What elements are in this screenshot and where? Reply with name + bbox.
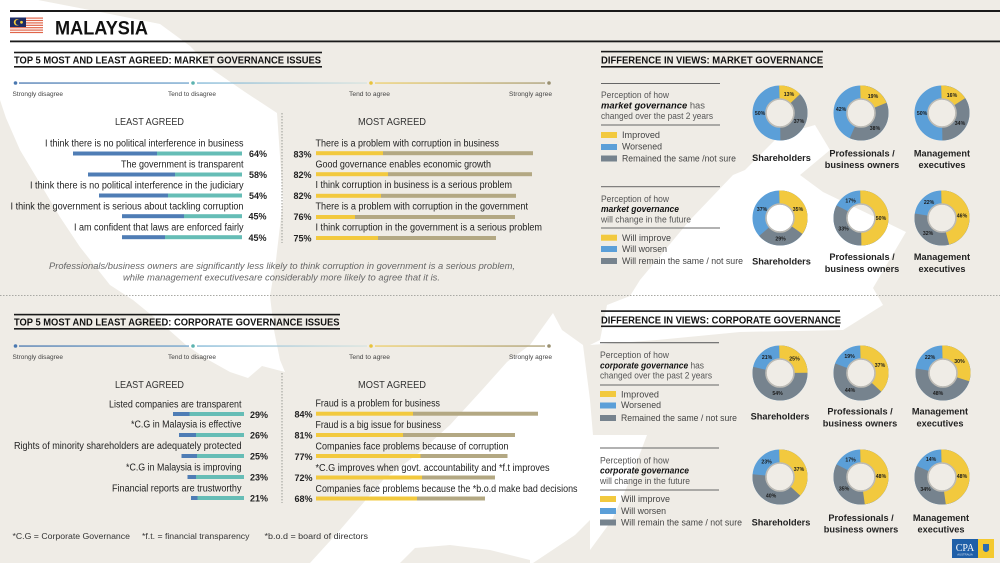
donut: management future: 14%	[926, 457, 937, 463]
donut: shareholders future: 29%	[775, 236, 786, 242]
legend: past 2 years: Perception of how	[600, 350, 670, 360]
donut: professionals future: 48%	[876, 474, 887, 480]
most agreed list: 84%	[294, 410, 313, 420]
least agreed list: Listed companies are transparent	[109, 399, 242, 410]
donut: professionals future: 17%	[845, 198, 856, 204]
legend: future: Will worsen	[622, 244, 667, 254]
group labels: business owners	[825, 264, 899, 274]
least agreed list: I think the government is serious about tackling corruption	[10, 201, 244, 212]
donut: professionals past: 19%	[844, 354, 855, 360]
italic note	[49, 261, 515, 282]
group labels: Professionals /	[828, 513, 894, 523]
CPA logo: CPA	[956, 543, 975, 554]
legend: past 2 years: corporate governance has	[600, 360, 705, 370]
most agreed list: There is a problem with corruption in business	[316, 138, 499, 149]
most agreed list: 76%	[294, 212, 312, 223]
least agreed list: 21%	[250, 494, 268, 504]
group labels: executives	[918, 264, 966, 274]
italic note: Professionals/business owners are significantly less likely to think corruption in government is a serious problem,	[49, 261, 515, 271]
donut: professionals past: 19%	[868, 94, 879, 100]
most agreed list: 81%	[294, 430, 313, 442]
donut: professionals future: 33%	[838, 226, 849, 232]
legend: past 2 years: changed over the past 2 years	[601, 111, 714, 121]
group labels	[752, 252, 970, 274]
donut: management past: 30%	[954, 359, 965, 365]
agreement scale: Strongly disagree	[12, 91, 63, 98]
donut: management future	[920, 456, 968, 498]
footnotes	[12, 531, 368, 541]
legend: past 2 years: Worsened	[621, 400, 661, 410]
donut: shareholders future	[760, 456, 805, 500]
agreement scale: Strongly disagree	[12, 354, 63, 361]
donut: shareholders future: 23%	[761, 460, 772, 466]
most agreed list: 68%	[294, 494, 313, 505]
most agreed list	[294, 379, 578, 505]
legend: future	[600, 186, 743, 266]
legend: past 2 years: market governance has	[601, 101, 706, 111]
agreement scale	[12, 344, 552, 361]
least agreed list: I think there is no political interference in the judiciary	[30, 180, 244, 191]
legend: future: will change in the future	[599, 476, 690, 486]
legend: past 2 years: Improved	[622, 130, 660, 140]
legend: future: will change in the future	[600, 214, 691, 224]
group labels: Professionals /	[829, 148, 895, 158]
most agreed list: Fraud is a problem for business	[316, 398, 440, 409]
legend: past 2 years: Remained the same / not sure	[621, 413, 737, 423]
donut: shareholders future: 37%	[794, 467, 805, 473]
least agreed list: 29%	[250, 410, 268, 421]
most agreed list: 77%	[294, 452, 313, 463]
donut: professionals past: 44%	[845, 388, 856, 394]
group labels: Shareholders	[752, 153, 811, 163]
group labels	[752, 513, 969, 534]
least agreed list: LEAST AGREED	[115, 116, 184, 128]
legend: future: Will improve	[622, 233, 671, 243]
most agreed list: I think corruption in the government is a serious problem	[316, 222, 542, 233]
dotted section divider	[0, 294, 1000, 296]
agreement scale	[12, 81, 552, 98]
agreement scale: Tend to disagree	[168, 91, 216, 98]
group labels: business owners	[825, 160, 899, 170]
heading: difference in views market governance: DIFFERENCE IN VIEWS: MARKET GOVERNANCE	[601, 56, 823, 66]
legend: future: Will worsen	[621, 506, 666, 516]
most agreed list: Companies face problems because the *b.o.d make bad decisions	[316, 484, 578, 495]
legend: past 2 years: Worsened	[622, 142, 662, 152]
italic note: while management executivesare considerably more likely to agree that it is.	[123, 272, 440, 282]
least agreed list: *C.G in Malaysia is effective	[131, 419, 242, 430]
legend: future: Will remain the same / not sure	[621, 518, 742, 528]
title: MALAYSIA	[55, 18, 148, 40]
donut: professionals future	[839, 456, 887, 498]
least agreed list: The government is transparent	[121, 159, 244, 170]
group labels: business owners	[823, 418, 897, 428]
CPA logo: AUSTRALIA	[957, 552, 973, 556]
donut: shareholders future: 40%	[766, 494, 777, 500]
most agreed list: Good governance enables economic growth	[316, 159, 491, 170]
group labels	[751, 406, 968, 428]
group labels: Management	[914, 148, 970, 158]
least agreed list: *C.G in Malaysia is improving	[126, 462, 242, 473]
most agreed list: MOST AGREED	[358, 379, 426, 391]
donut: management past: 34%	[955, 121, 966, 127]
footnotes: *b.o.d = board of directors	[264, 531, 368, 541]
CPA logo	[952, 539, 994, 558]
panel: difference in views, market governance	[600, 51, 970, 274]
group labels: Shareholders	[751, 412, 809, 422]
legend: future: corporate governance	[600, 466, 689, 476]
donut: professionals past: 37%	[875, 363, 886, 369]
most agreed list: Fraud is a big issue for business	[316, 420, 441, 431]
least agreed list: Financial reports are trustworthy	[112, 483, 242, 494]
least agreed list: 25%	[250, 452, 268, 462]
donut: professionals past: 38%	[870, 126, 881, 132]
group labels: Management	[914, 252, 970, 262]
group labels: executives	[916, 418, 964, 428]
donut: shareholders past: 54%	[772, 391, 783, 397]
least agreed list: I am confident that laws are enforced fairly	[74, 222, 244, 233]
donut: management future: 32%	[923, 231, 934, 237]
legend: future: Will remain the same / not sure	[622, 256, 743, 266]
agreement scale: Strongly agree	[509, 354, 552, 361]
least agreed list: 45%	[248, 212, 267, 223]
donut: management past: 48%	[933, 391, 944, 397]
donut: management future: 22%	[924, 200, 935, 206]
dotted column divider	[281, 373, 283, 503]
group labels: Shareholders	[752, 518, 810, 528]
donut: management future	[922, 198, 968, 238]
donut: management future: 46%	[957, 214, 968, 220]
donut: shareholders future: 35%	[793, 207, 804, 213]
least agreed list: 54%	[249, 191, 267, 202]
donut: professionals past	[836, 92, 882, 134]
footnotes: *C.G = Corporate Governance	[12, 531, 130, 541]
legend: future: market governance	[601, 204, 679, 214]
donut: professionals past	[840, 352, 886, 394]
donut: professionals future	[838, 198, 887, 238]
most agreed list: 83%	[294, 150, 312, 160]
panel: market governance issues	[10, 52, 552, 283]
agreement scale: Strongly agree	[509, 91, 552, 98]
group labels: Professionals /	[829, 252, 895, 262]
donut: management past	[922, 352, 965, 397]
legend: past 2 years: changed over the past 2 years	[600, 370, 713, 380]
heading: market governance issues: TOP 5 MOST AND LEAST AGREED: MARKET GOVERNANCE ISSUES	[14, 56, 321, 66]
most agreed list: Companies face problems because of corruption	[316, 441, 508, 452]
least agreed list	[14, 379, 268, 504]
legend: past 2 years: Improved	[621, 390, 659, 400]
most agreed list: I think corruption in business is a serious problem	[316, 180, 512, 191]
most agreed list: 82%	[294, 191, 312, 202]
group labels: executives	[918, 160, 966, 170]
agreement scale: Tend to disagree	[168, 354, 216, 361]
donut: management past: 22%	[925, 355, 936, 361]
most agreed list: 72%	[294, 473, 313, 484]
most agreed list: 75%	[294, 234, 312, 244]
legend: future	[599, 448, 742, 528]
donut: shareholders future	[757, 198, 804, 242]
most agreed list: 82%	[294, 170, 312, 181]
dotted column divider	[281, 113, 283, 243]
donut: management future: 48%	[957, 474, 968, 480]
most agreed list: There is a problem with corruption in the government	[316, 201, 528, 212]
least agreed list: 23%	[250, 472, 268, 484]
donut: professionals future: 35%	[839, 486, 850, 492]
least agreed list: Rights of minority shareholders are adequately protected	[14, 441, 242, 452]
least agreed list: LEAST AGREED	[115, 379, 184, 391]
group labels: Professionals /	[827, 406, 893, 416]
donut: shareholders past: 50%	[755, 111, 766, 117]
icon: Malaysian flag	[10, 18, 43, 34]
least agreed list: I think there is no political interference in business	[45, 138, 244, 149]
legend: future: Will improve	[621, 494, 670, 504]
legend: past 2 years: Remained the same /not sure	[622, 154, 736, 164]
donut: shareholders past: 21%	[762, 355, 773, 361]
donut: management future: 34%	[920, 487, 931, 493]
donut: professionals past: 42%	[836, 107, 847, 113]
donut: shareholders past	[760, 352, 800, 397]
least agreed list: 64%	[249, 149, 267, 160]
donut: professionals future: 50%	[876, 216, 887, 222]
donut: shareholders past: 37%	[794, 119, 805, 125]
least agreed list: 45%	[248, 233, 267, 244]
donut: management past: 50%	[917, 111, 928, 117]
agreement scale: Tend to agree	[349, 354, 390, 361]
panel: difference in views, corporate governance	[599, 310, 969, 534]
agreement scale: Tend to agree	[349, 91, 390, 98]
least agreed list: 26%	[250, 430, 268, 442]
group labels: Management	[913, 513, 969, 523]
least agreed list: 58%	[249, 170, 267, 181]
group labels: Shareholders	[752, 256, 811, 266]
footnotes: *f.t. = financial transparency	[142, 531, 250, 541]
donut: management past: 16%	[947, 93, 958, 99]
group labels	[752, 148, 970, 170]
donut: professionals future: 17%	[845, 458, 856, 464]
legend: past 2 years	[601, 83, 736, 164]
donut: shareholders future: 37%	[757, 207, 768, 213]
legend: past 2 years: Perception of how	[601, 90, 670, 100]
legend: past 2 years	[600, 342, 737, 423]
group labels: Management	[912, 406, 968, 416]
donut: shareholders past: 25%	[789, 356, 800, 362]
most agreed list: *C.G improves when govt. accountability and *f.t improves	[316, 463, 550, 474]
donut: shareholders past: 13%	[784, 92, 795, 98]
heading: difference in views corporate governance: DIFFERENCE IN VIEWS: CORPORATE GOVERNANCE	[601, 315, 841, 326]
legend: future: Perception of how	[601, 194, 670, 204]
donut: management past	[917, 92, 966, 134]
donut: shareholders past	[755, 92, 805, 134]
least agreed list	[10, 116, 267, 244]
most agreed list: MOST AGREED	[358, 116, 426, 128]
header	[10, 10, 1000, 42]
panel: corporate governance issues	[12, 314, 578, 541]
most agreed list	[294, 116, 542, 244]
group labels: business owners	[824, 524, 898, 534]
legend: future: Perception of how	[600, 456, 670, 466]
group labels: executives	[918, 524, 964, 534]
heading: corporate governance issues: TOP 5 MOST AND LEAST AGREED: CORPORATE GOVERNANCE ISSUES	[14, 317, 340, 328]
